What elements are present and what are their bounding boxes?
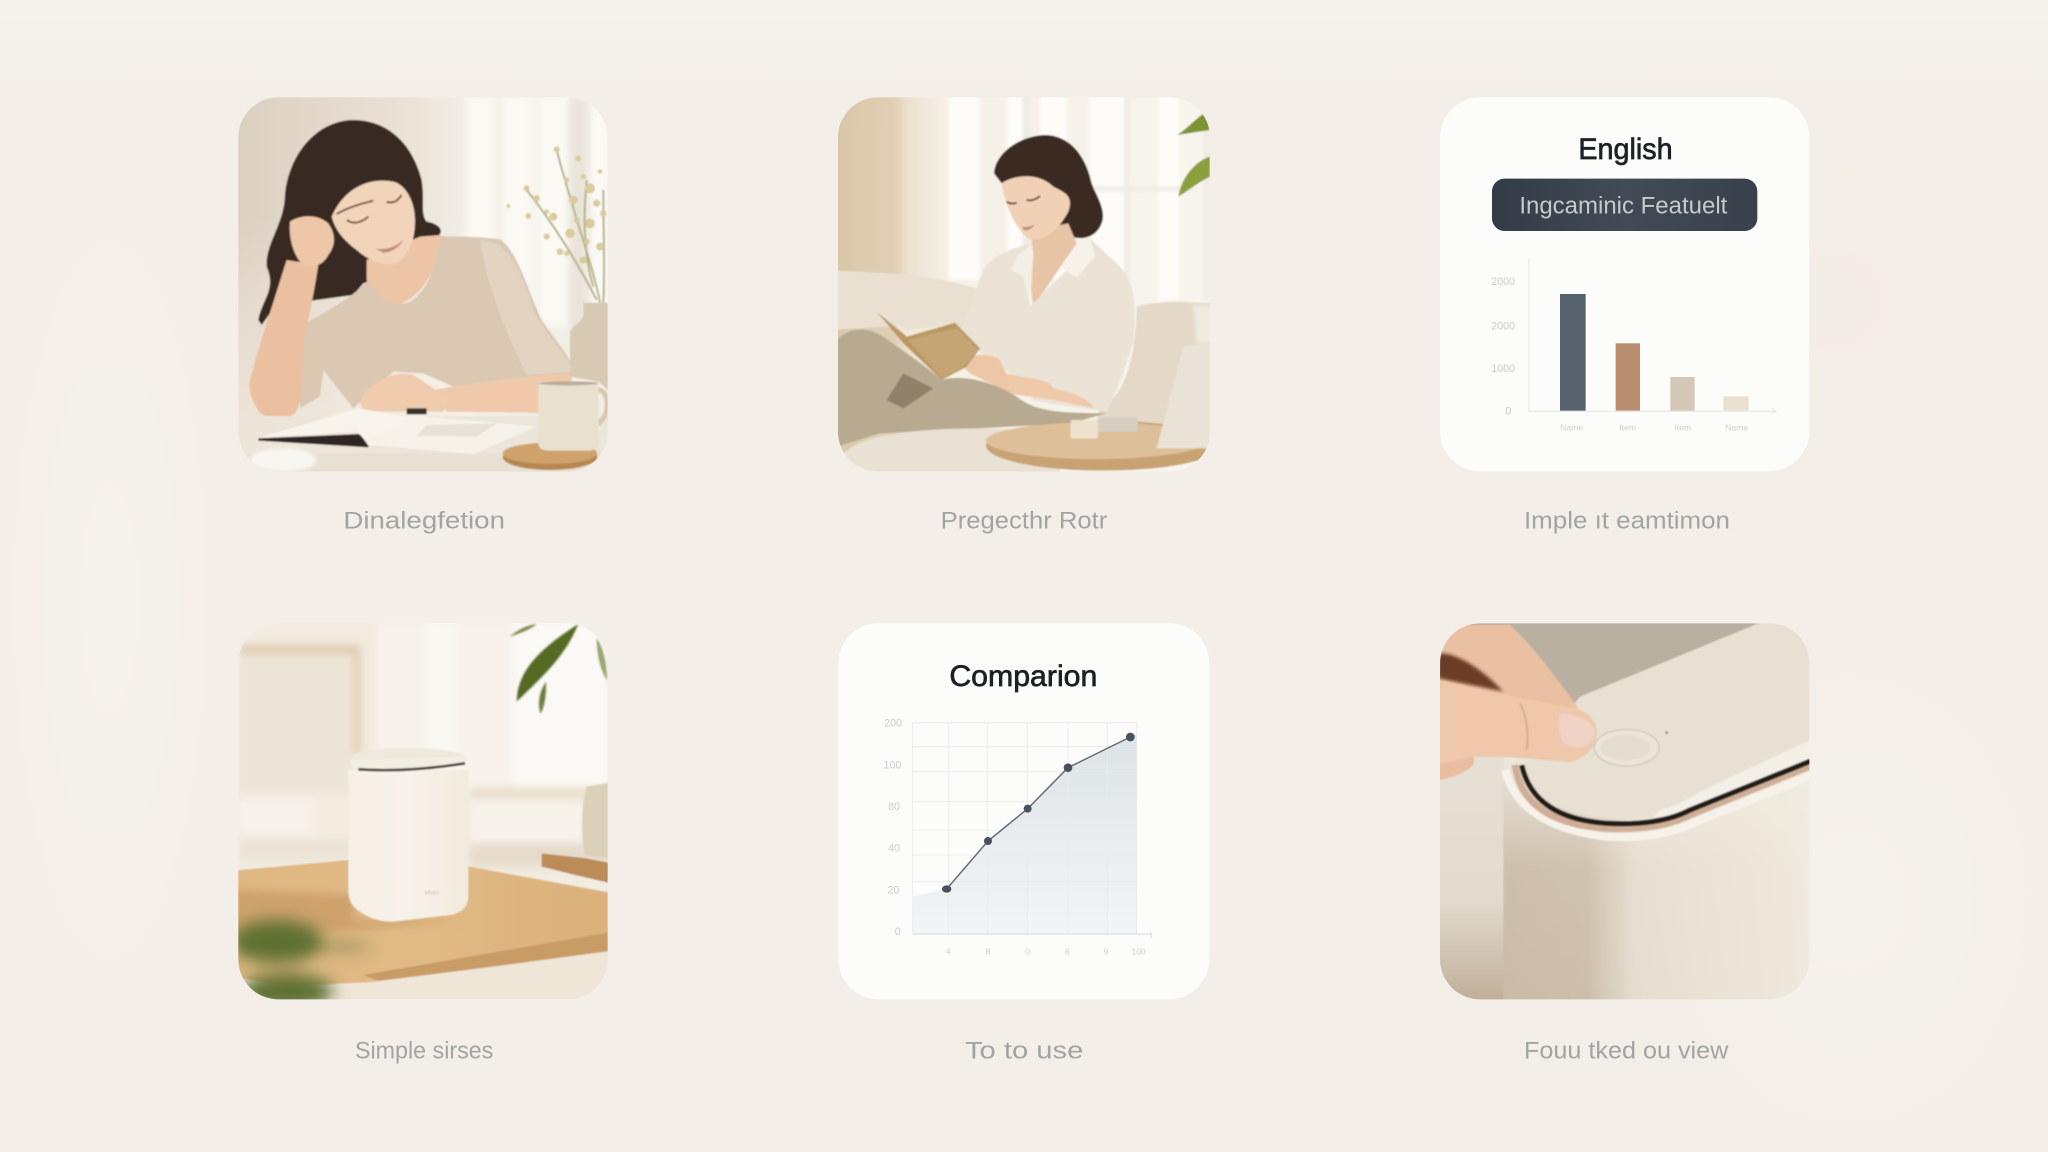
bar chart xyxy=(1491,258,1776,433)
bar chart: Name xyxy=(1725,423,1748,433)
tablet xyxy=(1157,343,1212,448)
photo: woman at table xyxy=(233,93,613,477)
panel: woman reading on sofa xyxy=(833,93,1221,534)
forearm xyxy=(1005,373,1095,408)
panel: bar chart card xyxy=(1440,97,1809,534)
table xyxy=(242,415,608,454)
label: Fouu tked ou view xyxy=(1524,1037,1729,1064)
line chart: 100 xyxy=(1131,946,1146,956)
bar chart: 1000 xyxy=(1491,363,1515,375)
objects on table xyxy=(1071,420,1098,438)
lid xyxy=(1525,620,1813,819)
sofa back xyxy=(838,270,976,332)
line chart: 20 xyxy=(887,884,899,896)
book xyxy=(877,312,980,380)
rim highlight xyxy=(1505,770,1813,837)
hair xyxy=(994,135,1103,238)
line chart: 0 xyxy=(1025,946,1030,956)
label: Dinalegfetion xyxy=(343,507,505,534)
line chart: 8 xyxy=(986,946,991,956)
line chart: 40 xyxy=(888,842,900,854)
label: To to use xyxy=(965,1037,1083,1064)
line chart: 0 xyxy=(895,926,901,938)
card background xyxy=(1440,97,1809,471)
line chart: 80 xyxy=(888,801,900,813)
bar chart: 2000 xyxy=(1491,276,1515,288)
line chart: 9 xyxy=(1104,946,1109,956)
basket and tray xyxy=(542,853,612,883)
panel: line chart card xyxy=(838,623,1209,1064)
lid front highlight xyxy=(1653,738,1813,817)
book xyxy=(258,434,368,447)
raised arm xyxy=(250,260,318,419)
photo: device on table: ebdo xyxy=(424,889,439,896)
card title: Comparion xyxy=(949,660,1097,693)
card title: English xyxy=(1578,133,1673,166)
photo: close-up of device xyxy=(1433,620,1813,1003)
coaster xyxy=(502,454,598,471)
resting forearm xyxy=(433,373,573,413)
bar chart: Item xyxy=(1619,423,1636,433)
panel: finger pressing device button xyxy=(1433,620,1813,1064)
line chart: 4 xyxy=(946,946,951,956)
line chart: 6 xyxy=(1065,946,1070,956)
line chart: 200 xyxy=(884,718,902,730)
face xyxy=(1002,176,1070,240)
card background xyxy=(838,623,1209,999)
bar chart: 2000 xyxy=(1491,320,1515,332)
label: Simple sirses xyxy=(355,1037,493,1064)
bar chart: 0 xyxy=(1505,406,1511,418)
neck xyxy=(367,235,442,304)
shirt xyxy=(962,238,1135,412)
fingers xyxy=(1433,625,1597,782)
hair back xyxy=(258,120,441,325)
dark pill heading: Ingcaminic Featuelt xyxy=(1519,192,1728,219)
line chart: 100 xyxy=(884,760,901,772)
device xyxy=(348,770,468,922)
bar chart: Name xyxy=(1560,423,1583,433)
sofa seat xyxy=(843,428,1060,475)
label: Pregecthr Rotr xyxy=(941,507,1107,534)
button xyxy=(1594,729,1659,766)
panel: product on wooden table xyxy=(230,620,613,1064)
bar chart: Item xyxy=(1674,423,1691,433)
trousers xyxy=(837,330,1107,447)
panel: woman resting head while reading xyxy=(233,93,613,534)
mug xyxy=(598,390,607,423)
leaves xyxy=(510,624,607,714)
photo: device on table xyxy=(230,620,613,1010)
leaves xyxy=(1177,111,1210,135)
device body xyxy=(1503,757,1813,1003)
face xyxy=(332,181,415,264)
white dish xyxy=(250,448,317,472)
table xyxy=(233,860,613,987)
sweater xyxy=(299,236,574,408)
label: Imple ıt eamtimon xyxy=(1524,507,1730,534)
photo: woman on sofa xyxy=(833,93,1221,477)
green foliage xyxy=(230,920,370,1010)
vase xyxy=(570,303,610,392)
dark pill heading xyxy=(1492,179,1757,231)
line chart xyxy=(884,718,1152,956)
neck xyxy=(1028,223,1077,307)
side table xyxy=(986,421,1221,471)
flowers xyxy=(527,150,604,303)
